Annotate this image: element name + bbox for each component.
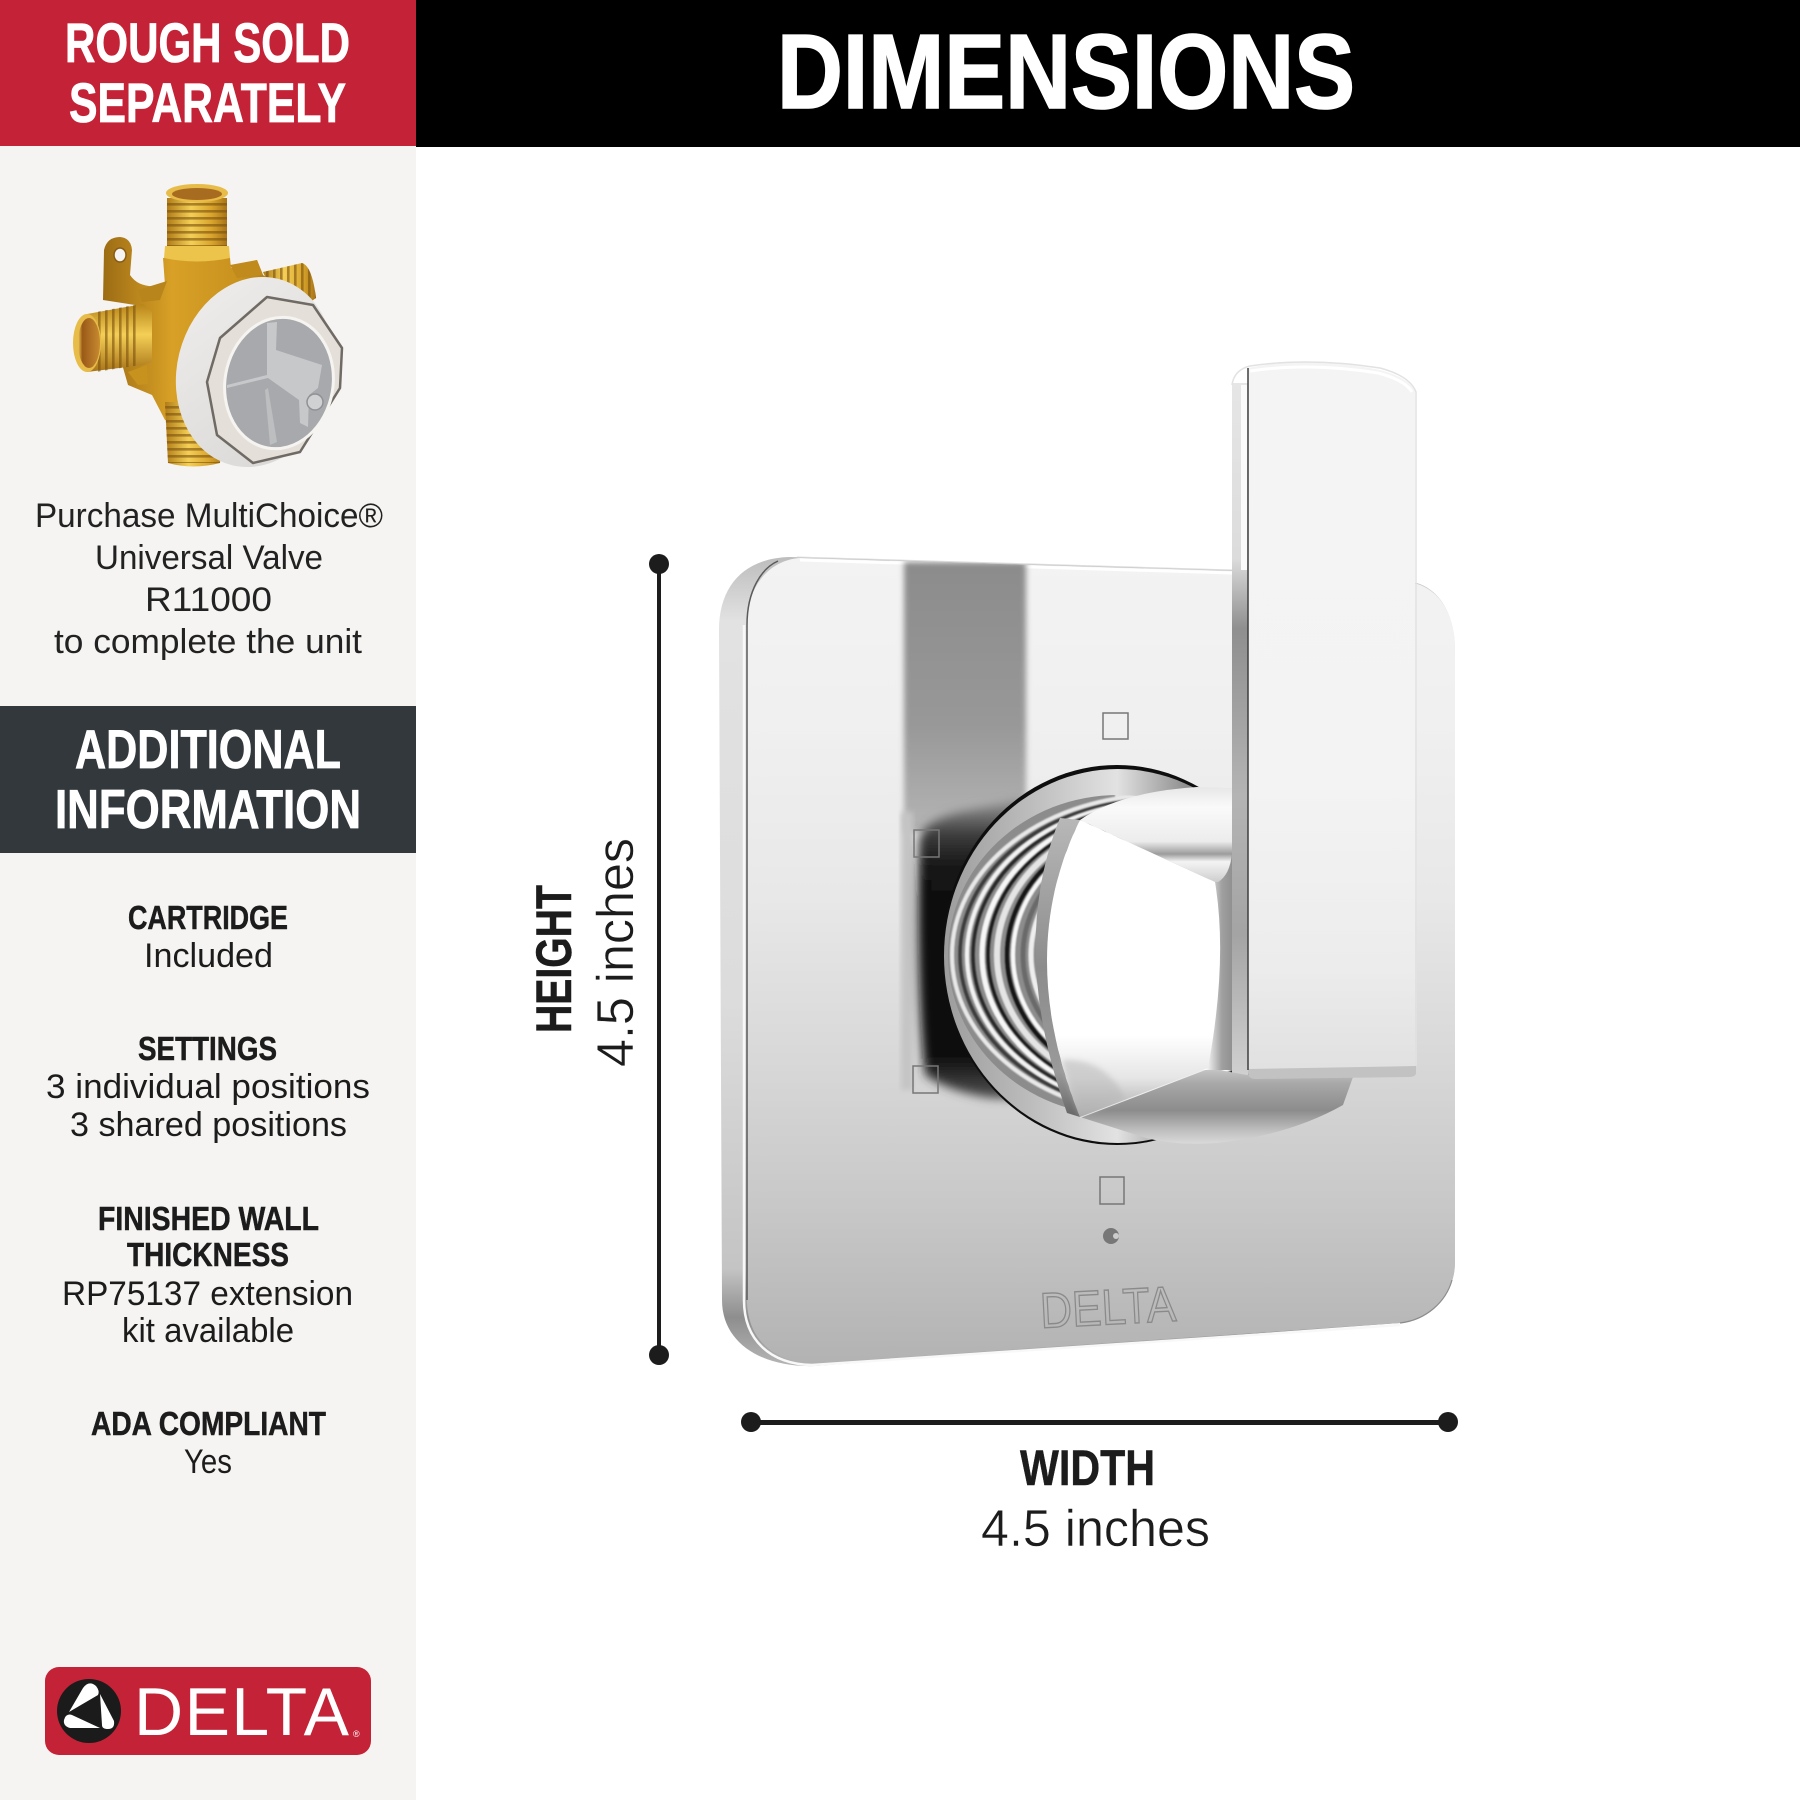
label: width: 4.5 inches xyxy=(981,1500,1210,1558)
knob xyxy=(1036,787,1353,1144)
engraved delta wordmark: DELTA xyxy=(1039,1276,1178,1339)
header: rough sold separately xyxy=(0,0,416,146)
heading: additional information: ADDITIONAL xyxy=(75,718,341,780)
header: rough sold separately: ROUGH SOLD xyxy=(65,11,350,74)
header: dimensions title xyxy=(416,0,1800,147)
header: rough sold separately: SEPARATELY xyxy=(69,71,346,134)
cold symbol xyxy=(1103,1228,1119,1244)
lever neck xyxy=(1232,383,1248,1075)
text: settings: SETTINGS xyxy=(138,1030,277,1067)
text: ada compliant: Yes xyxy=(184,1443,232,1481)
plate reflections xyxy=(898,561,1030,1106)
logo: delta: ® xyxy=(353,1729,360,1739)
text: finished wall thickness xyxy=(62,1200,353,1350)
text: ada compliant: ADA COMPLIANT xyxy=(91,1405,326,1442)
label: height xyxy=(526,838,645,1067)
text: cartridge: Included xyxy=(144,937,273,975)
label: height: 4.5 inches xyxy=(587,838,645,1067)
trim plate xyxy=(719,557,1455,1366)
text: settings: 3 shared positions xyxy=(70,1106,347,1144)
label: width xyxy=(981,1440,1210,1558)
label: height: HEIGHT xyxy=(526,885,582,1033)
collar and threads xyxy=(944,765,1248,1145)
lever handle xyxy=(1232,362,1416,1079)
text: ada compliant xyxy=(91,1405,326,1481)
product: diverter trim xyxy=(719,362,1455,1366)
heading: additional information: INFORMATION xyxy=(55,778,361,840)
logo: delta xyxy=(45,1667,371,1755)
logo: delta: DELTA xyxy=(134,1674,350,1750)
text: purchase valve note: to complete the unit xyxy=(54,623,363,661)
text: cartridge xyxy=(128,899,288,975)
dimension line: width xyxy=(741,1412,1458,1432)
illustration: rough-in valve xyxy=(73,184,354,484)
engraved markers xyxy=(913,713,1128,1204)
text: cartridge: CARTRIDGE xyxy=(128,899,288,936)
text: purchase valve note xyxy=(35,497,383,661)
text: settings: 3 individual positions xyxy=(46,1068,370,1106)
text: finished wall thickness: FINISHED WALL xyxy=(98,1200,319,1237)
text: purchase valve note: R11000 xyxy=(145,581,272,619)
text: finished wall thickness: RP75137 extension xyxy=(62,1275,353,1313)
text: finished wall thickness: THICKNESS xyxy=(127,1236,289,1273)
heading: additional information xyxy=(0,706,416,853)
dimension line: height xyxy=(649,554,669,1365)
panel: sidebar xyxy=(0,0,416,1800)
text: settings xyxy=(46,1030,370,1144)
text: finished wall thickness: kit available xyxy=(122,1312,294,1350)
header: dimensions title: DIMENSIONS xyxy=(777,13,1355,131)
text: purchase valve note: Universal Valve xyxy=(95,539,323,577)
label: width: WIDTH xyxy=(1020,1440,1155,1496)
text: purchase valve note: Purchase MultiChoice® xyxy=(35,497,383,535)
